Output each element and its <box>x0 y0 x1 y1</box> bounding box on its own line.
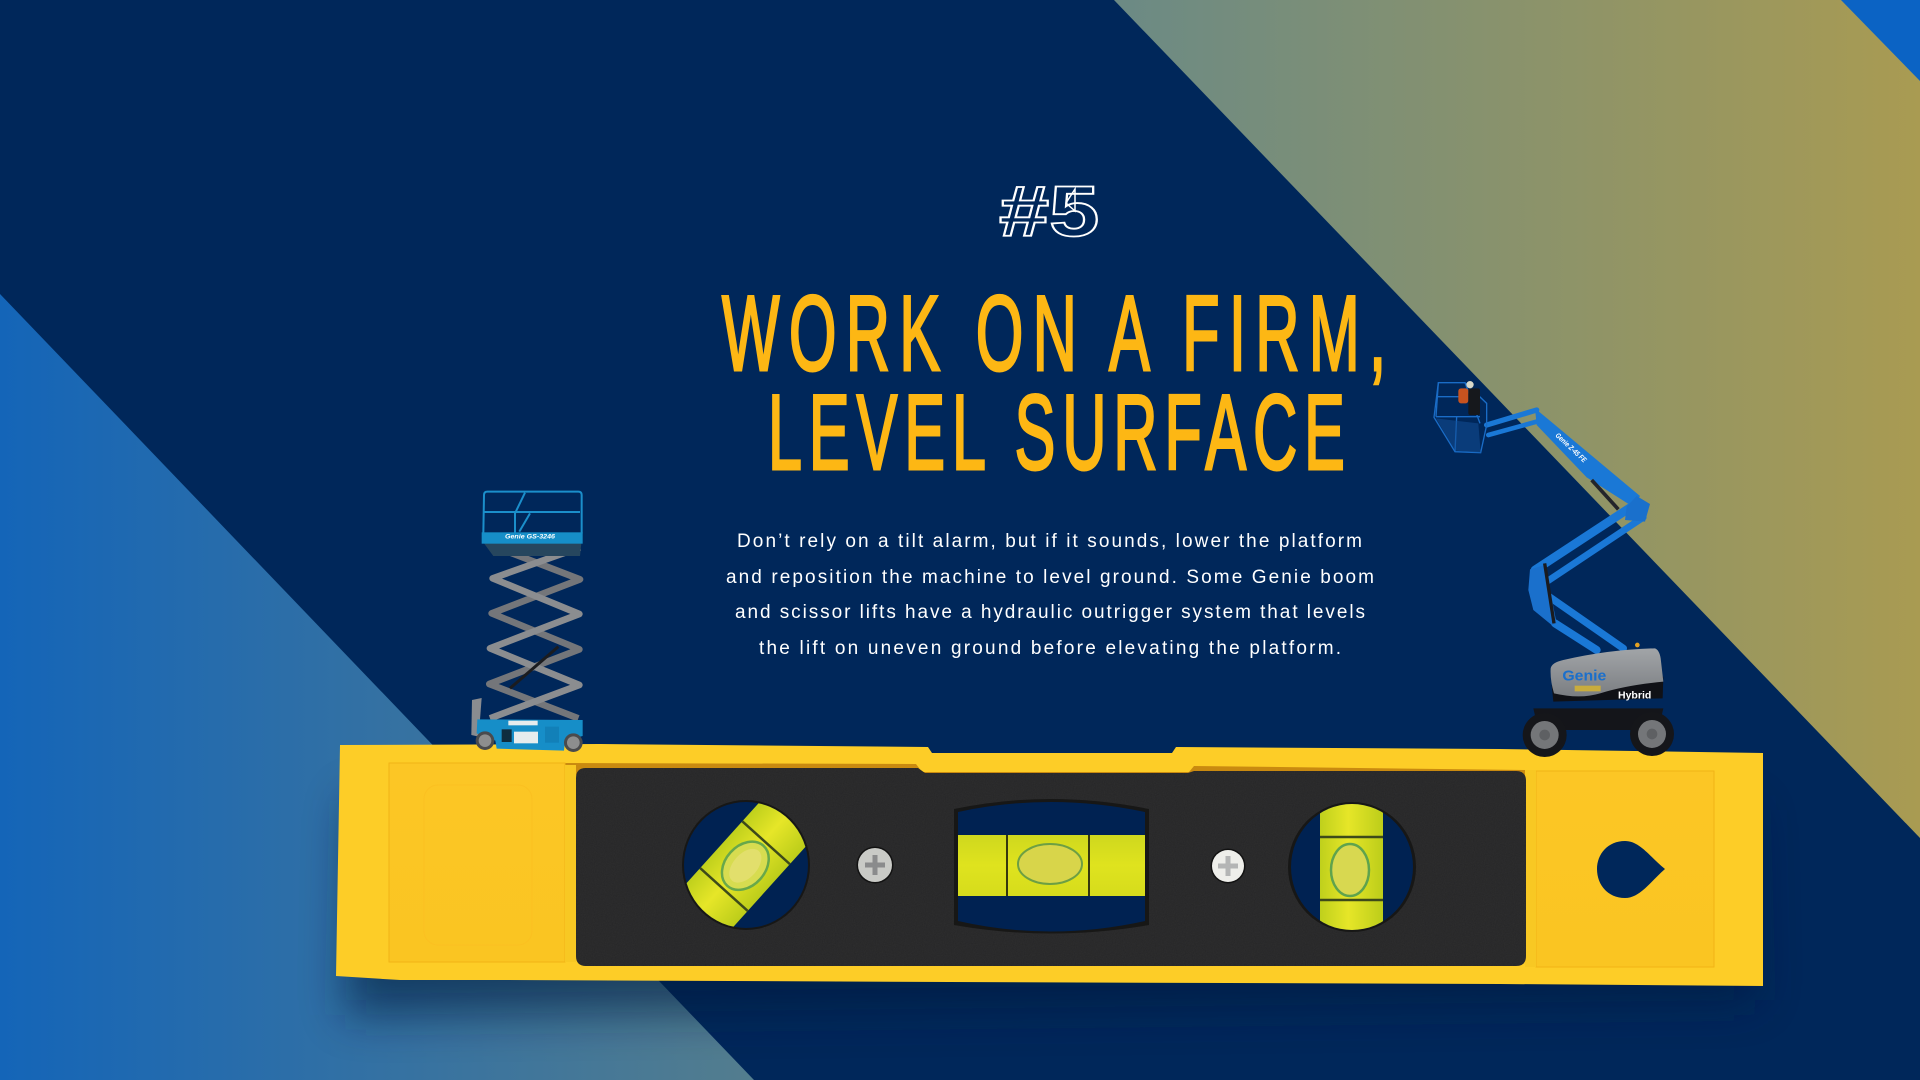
scissor lift rear wheel <box>476 731 494 750</box>
boom lift beacon <box>1635 643 1640 647</box>
level casing inner top shadow <box>565 763 1525 775</box>
boom lift under boom cylinders <box>1592 480 1618 509</box>
boom lift cylinder <box>1545 563 1554 623</box>
level black insert <box>576 768 1526 966</box>
scissor lift hydraulic cylinder <box>510 647 558 688</box>
boom lift riser <box>1528 565 1557 625</box>
scissor lift front wheel <box>564 733 583 752</box>
spirit level tool <box>336 744 1763 986</box>
level left strip <box>565 765 576 962</box>
boom lift warning decal <box>1575 686 1601 691</box>
title <box>722 274 1386 492</box>
left vial window <box>682 800 810 930</box>
boom lift rear wheel <box>1523 713 1567 757</box>
boom lift upper boom <box>1535 408 1640 507</box>
level right strip <box>1525 770 1536 967</box>
boom lift jib <box>1487 410 1537 435</box>
level right yellow panel <box>1536 771 1714 967</box>
scissor lift blue base <box>477 719 583 751</box>
body text: and reposition the machine to level ground. Some Genie boom <box>726 567 1374 588</box>
teardrop hanging hole <box>1597 841 1665 898</box>
boom lift hybrid badge: Hybrid <box>1618 690 1651 701</box>
body text: Don’t rely on a tilt alarm, but if it sounds, lower the platform <box>737 531 1362 552</box>
scissor lift model label: Genie GS-3246 <box>505 533 556 540</box>
background: top right blue corner <box>1841 0 1920 81</box>
boom lift grey hood <box>1551 648 1663 696</box>
boom lift operator <box>1458 381 1480 415</box>
boom lift knuckle <box>1625 496 1650 522</box>
step number: #5 <box>999 173 1099 252</box>
boom lift model label: Genie Z-45 FE <box>1554 431 1589 465</box>
title: LEVEL SURFACE <box>768 373 1345 492</box>
title: WORK ON A FIRM, <box>722 274 1386 393</box>
boom lift brand: Genie <box>1562 669 1606 685</box>
boom lift chassis <box>1533 708 1663 730</box>
background: olive diagonal band <box>1114 0 1920 838</box>
boom lift lower arms <box>1547 595 1623 650</box>
right vial window <box>1288 800 1416 935</box>
boom lift basket floor <box>1436 418 1481 453</box>
boom lift basket rails <box>1434 383 1487 453</box>
level yellow casing <box>336 744 1763 986</box>
boom lift hood base <box>1552 677 1663 702</box>
left screw <box>856 846 894 884</box>
body text <box>726 531 1374 659</box>
right screw <box>1210 848 1246 884</box>
boom lift mid arms <box>1535 503 1643 582</box>
level drop shadow <box>345 800 1755 1015</box>
body text: and scissor lifts have a hydraulic outrigger system that levels <box>735 602 1365 623</box>
boom lift front wheel <box>1630 712 1674 756</box>
body text: the lift on uneven ground before elevating the platform. <box>759 638 1341 659</box>
scissor lift deck underside <box>484 543 581 556</box>
background: lower left blue diagonal <box>0 294 754 1080</box>
boom lift <box>1434 381 1674 757</box>
scissor lift arms <box>489 547 580 718</box>
scissor lift rear plate <box>471 698 482 737</box>
centre vial window <box>954 799 1149 934</box>
scissor lift guard rails <box>483 492 582 533</box>
scissor lift <box>471 492 583 752</box>
scissor lift decals <box>502 721 559 743</box>
level left yellow panel <box>389 763 565 962</box>
scissor lift deck <box>482 532 583 544</box>
